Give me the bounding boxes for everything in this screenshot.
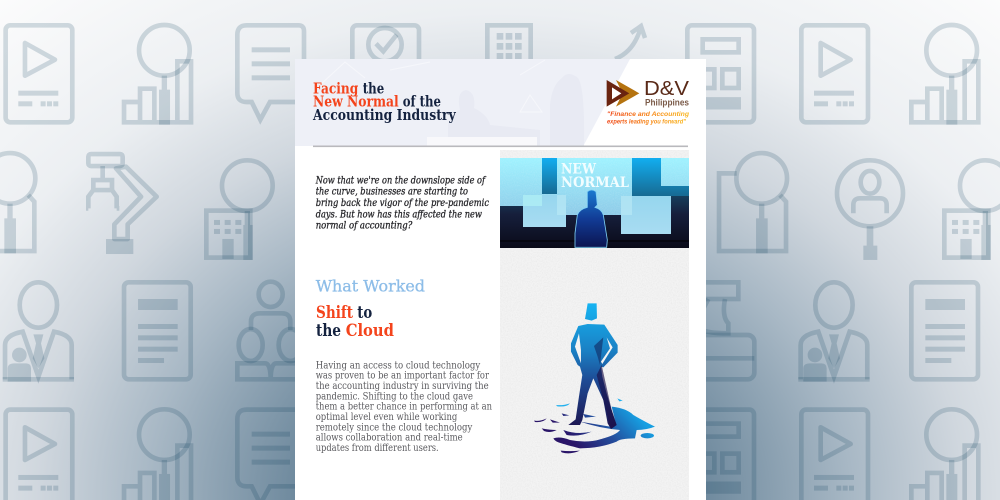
section title: Shift to the Cloud: Shift bbox=[316, 303, 353, 322]
icon: people group bbox=[237, 282, 304, 379]
title: the bbox=[363, 79, 384, 97]
section title: Shift to the Cloud: Cloud bbox=[346, 321, 394, 340]
icon: play document bbox=[801, 410, 868, 500]
icon: rising arrow bbox=[615, 26, 645, 59]
icon: stamp bbox=[687, 282, 754, 379]
intro text: Now that we're on the downslope side of bbox=[315, 175, 487, 186]
icon: building magnifier bbox=[206, 160, 273, 260]
icon: chart magnifier bbox=[911, 25, 978, 125]
title: of the bbox=[403, 93, 441, 111]
title: Facing bbox=[313, 79, 359, 97]
icon: building magnifier bbox=[944, 160, 1000, 260]
icon: building grid bbox=[487, 25, 531, 122]
logo: D&V Philippines bbox=[607, 77, 689, 125]
section heading: What Worked: What Worked bbox=[316, 277, 425, 296]
illustration backdrop: paper texture bbox=[500, 150, 689, 500]
body text: the accounting industry in surviving the bbox=[316, 381, 489, 392]
intro text: the curve, businesses are starting to bbox=[316, 187, 468, 198]
body text: allows collaboration and real-time bbox=[316, 433, 463, 444]
icon: chat bubble bbox=[237, 25, 304, 120]
icon: play document bbox=[6, 410, 72, 500]
icon: logo chevrons bbox=[607, 80, 639, 107]
icon: document magnifier bbox=[0, 153, 35, 253]
body text: optimal level even while working bbox=[316, 412, 458, 423]
logo: D&V Philippines: D&V bbox=[644, 77, 689, 100]
header photo band bbox=[295, 59, 630, 146]
icon: person magnifier bbox=[837, 160, 903, 260]
section title: Shift to the Cloud: to bbox=[357, 303, 372, 322]
icon: report document bbox=[124, 282, 191, 379]
intro text: normal of accounting? bbox=[316, 221, 413, 232]
section title: Shift to the Cloud bbox=[316, 303, 394, 340]
icon: layout document bbox=[687, 410, 754, 500]
illustration: new normal bbox=[500, 158, 689, 248]
body text: Having an access to cloud technology bbox=[316, 360, 481, 371]
puddle bbox=[534, 398, 655, 453]
icon: document magnifier bbox=[719, 153, 787, 253]
body text: them a better chance in performing at an bbox=[316, 402, 492, 413]
icon: play document bbox=[801, 25, 868, 122]
panel: infographic page bbox=[295, 59, 706, 500]
title bbox=[312, 79, 457, 124]
icon: layout document bbox=[687, 25, 754, 122]
figure bbox=[568, 303, 618, 429]
icon: play document bbox=[6, 25, 72, 122]
icon: chart magnifier bbox=[124, 25, 191, 125]
icon: check document bbox=[352, 25, 419, 122]
intro text: days. But how has this affected the new bbox=[316, 209, 482, 220]
body text: remotely since the cloud technology bbox=[316, 422, 473, 433]
icon: chart magnifier bbox=[911, 409, 978, 500]
title: Accounting Industry bbox=[312, 106, 457, 124]
body text: was proven to be an important factor for bbox=[316, 371, 489, 382]
illustration: standing figure on puddle bbox=[534, 303, 655, 453]
icon: report document bbox=[911, 282, 978, 379]
icon: businessperson bbox=[3, 282, 74, 382]
illustration text: NORMAL bbox=[561, 175, 629, 191]
logo: D&V Philippines: "Finance and Accounting bbox=[607, 112, 689, 118]
body text: updates from different users. bbox=[316, 443, 439, 454]
illustration text: NEW bbox=[561, 162, 596, 178]
divider bbox=[313, 146, 688, 147]
logo: D&V Philippines: Philippines bbox=[645, 97, 689, 107]
icon: chart magnifier bbox=[124, 409, 191, 500]
figure silhouette bbox=[575, 190, 607, 247]
intro text: bring back the vigor of the pre-pandemic bbox=[316, 198, 489, 209]
icon: chat bubble bbox=[237, 410, 304, 500]
icon: businessperson bbox=[798, 282, 870, 382]
section title: Shift to the Cloud: the bbox=[316, 321, 341, 340]
body text bbox=[316, 360, 492, 454]
illustration text bbox=[561, 162, 629, 191]
logo: D&V Philippines: experts leading you forward" bbox=[607, 119, 686, 125]
title: New Normal bbox=[313, 93, 399, 111]
intro text bbox=[315, 175, 489, 232]
icon: robot arm bbox=[86, 154, 157, 254]
body text: pandemic. Shifting to the cloud gave bbox=[316, 391, 473, 402]
